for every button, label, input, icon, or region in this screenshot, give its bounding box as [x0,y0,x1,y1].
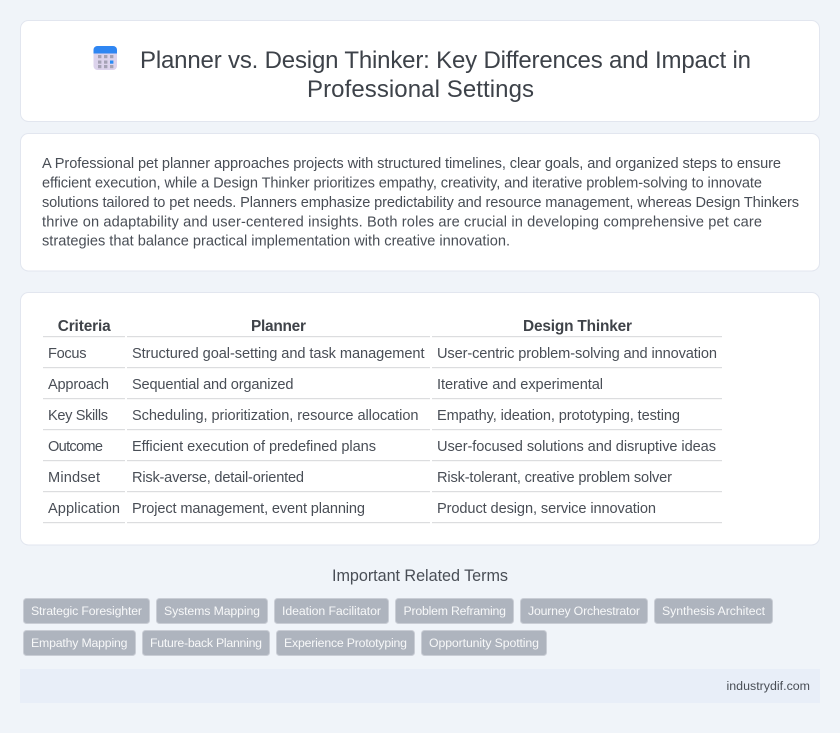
row: application: Project management, event planning [132,501,365,517]
intro text block: strategies that balance practical implementation with creative innovation. [42,234,510,250]
table header: Criteria [58,318,111,335]
row: key skills: Key Skills [48,408,108,424]
tag: Synthesis Architect [654,598,772,624]
tag: Problem Reframing [396,598,514,624]
table header: Planner [251,318,306,335]
title: Planner vs. Design Thinker: Key Differences and Impact in [140,47,751,74]
row: key skills: Scheduling, prioritization, resource allocation [132,408,418,424]
icon: calendar [94,46,117,70]
row: application: Product design, service innovation [437,501,656,517]
tag: Opportunity Spotting [422,630,546,656]
tag: Opportunity Spotting: Opportunity Spotting [429,636,539,650]
intro text block: efficient execution, while a Design Thinker prioritizes empathy, creativity, and iterative problem-solving to innovate [42,175,762,191]
intro text block: thrive on adaptability and user-centered insights. Both roles are crucial in developing comprehensive pet care [42,214,762,230]
row: outcome: User-focused solutions and disruptive ideas [437,439,716,455]
tag: Problem Reframing: Problem Reframing [404,604,506,618]
row: application [48,501,656,517]
panel: comparison table [20,292,820,545]
intro text block: A Professional pet planner approaches projects with structured timelines, clear goals, and organized steps to ensure [42,156,781,172]
row: approach: Iterative and experimental [437,377,603,393]
tag: Experience Prototyping [276,630,414,656]
row: focus: Structured goal-setting and task management [132,346,424,362]
row: focus: Focus [48,346,86,362]
tag: Strategic Foresighter [24,598,150,624]
tag: Ideation Facilitator: Ideation Facilitator [282,604,381,618]
tag: Experience Prototyping: Experience Prototyping [284,636,407,650]
row: outcome [48,439,716,455]
tag: Empathy Mapping [24,630,136,656]
table header [58,318,632,335]
row: outcome: Outcome [48,439,103,455]
panel: introduction [20,134,820,271]
header panel [20,20,820,122]
title [140,47,751,103]
row: application: Application [48,501,120,517]
row: approach: Approach [48,377,109,393]
tag: Ideation Facilitator [274,598,388,624]
row: approach [48,377,603,393]
tag: Synthesis Architect: Synthesis Architect [662,604,766,618]
row: mindset: Mindset [48,470,100,486]
title: Professional Settings [307,76,534,103]
related term tags [24,598,772,656]
intro text block [42,156,799,250]
footer bar: industrydif.com [726,679,810,693]
tag: Systems Mapping [156,598,268,624]
footer bar [20,669,820,703]
row: approach: Sequential and organized [132,377,294,393]
heading: important related terms: Important Related Terms [332,567,508,585]
row: mindset: Risk-averse, detail-oriented [132,470,304,486]
row: focus: User-centric problem-solving and innovation [437,346,717,362]
tag: Strategic Foresighter: Strategic Foresighter [31,604,142,618]
tag: Systems Mapping: Systems Mapping [164,604,260,618]
row: key skills [48,408,680,424]
row: mindset: Risk-tolerant, creative problem solver [437,470,672,486]
table header: Design Thinker [523,318,632,335]
row: mindset [48,470,672,486]
row: key skills: Empathy, ideation, prototyping, testing [437,408,680,424]
tag: Journey Orchestrator [520,598,648,624]
tag: Empathy Mapping: Empathy Mapping [31,636,128,650]
tag: Journey Orchestrator: Journey Orchestrator [528,604,640,618]
row: outcome: Efficient execution of predefined plans [132,439,376,455]
tag: Future-back Planning: Future-back Planning [150,636,262,650]
intro text block: solutions tailored to pet needs. Planners emphasize predictability and resource management, whereas Design Thinkers [42,195,799,211]
tag: Future-back Planning [142,630,270,656]
row: focus [48,346,717,362]
